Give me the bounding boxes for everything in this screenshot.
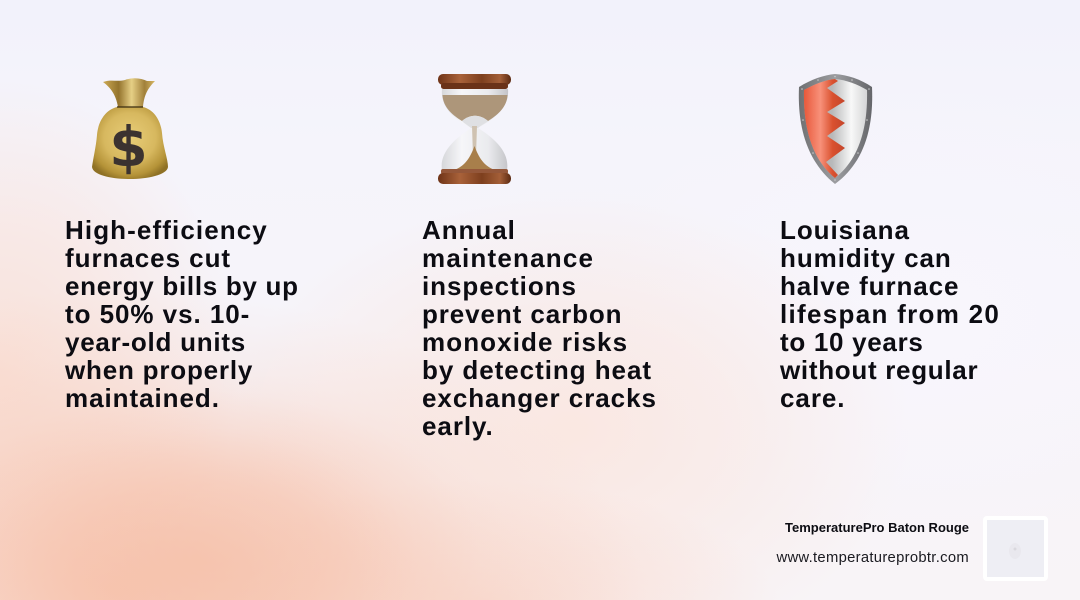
text block: Louisiana humidity: without regular xyxy=(780,355,978,385)
footer website: www.temperatureprobtr.com xyxy=(776,550,969,566)
text block: Louisiana humidity: halve furnace xyxy=(780,271,959,301)
icon: hourglass xyxy=(438,74,511,184)
text block: energy savings xyxy=(64,215,299,413)
logo placeholder xyxy=(983,516,1048,581)
footer company name: TemperaturePro Baton Rouge xyxy=(785,520,969,535)
text block: annual maintenance: early. xyxy=(422,411,494,441)
text block: annual maintenance xyxy=(422,215,657,441)
text block: energy savings: maintained. xyxy=(65,383,220,413)
text block: Louisiana humidity: humidity can xyxy=(780,243,952,273)
text block: annual maintenance: exchanger cracks xyxy=(422,383,657,413)
text block: energy savings: year-old units xyxy=(65,327,246,357)
text block: energy savings: to 50% vs. 10- xyxy=(65,299,250,329)
text block: Louisiana humidity: lifespan from 20 xyxy=(780,299,1000,329)
text block: annual maintenance: monoxide risks xyxy=(422,327,628,357)
icon: shield xyxy=(798,74,872,184)
text block: Louisiana humidity: to 10 years xyxy=(780,327,924,357)
text block: energy savings: High-efficiency xyxy=(65,215,268,245)
text block: Louisiana humidity xyxy=(780,215,1000,413)
text block: energy savings: when properly xyxy=(65,355,253,385)
text block: Louisiana humidity: Louisiana xyxy=(780,215,910,245)
text block: annual maintenance: Annual xyxy=(422,215,516,245)
text block: annual maintenance: by detecting heat xyxy=(422,355,652,385)
text block: annual maintenance: inspections xyxy=(422,271,577,301)
text block: annual maintenance: prevent carbon xyxy=(422,299,622,329)
text block: energy savings: energy bills by up xyxy=(65,271,299,301)
text block: Louisiana humidity: care. xyxy=(780,383,845,413)
icon: money bag xyxy=(92,78,168,179)
text block: energy savings: furnaces cut xyxy=(65,243,231,273)
text block: annual maintenance: maintenance xyxy=(422,243,594,273)
icon glyph: dollar sign: $ xyxy=(109,115,148,179)
